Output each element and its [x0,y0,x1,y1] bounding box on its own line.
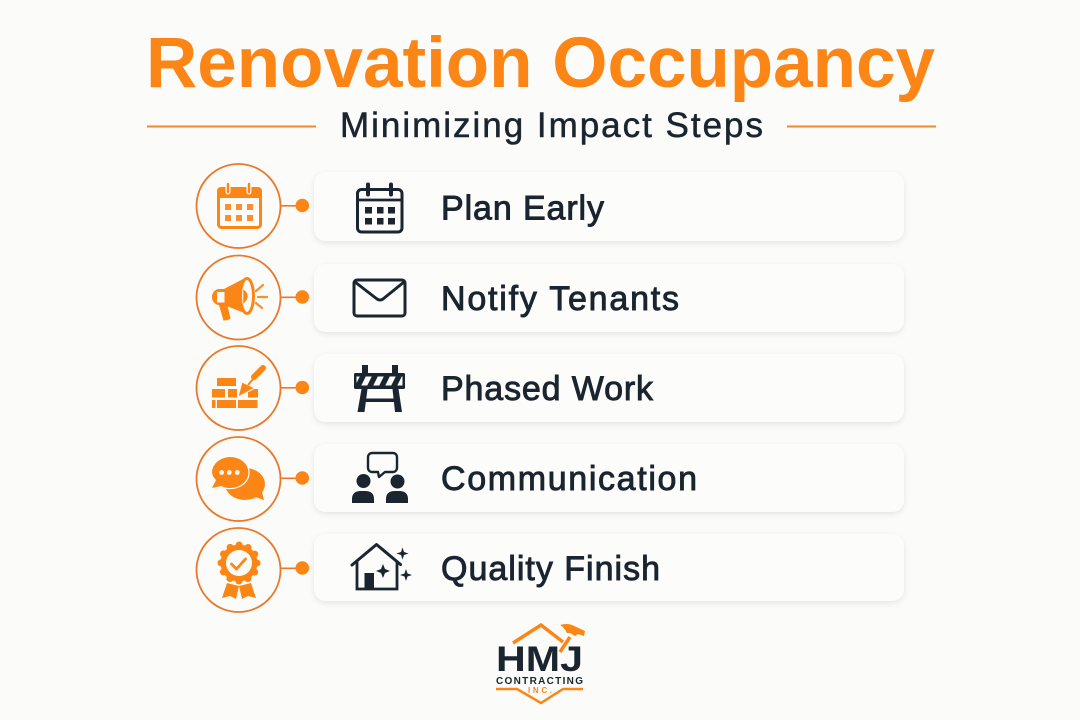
panel: Communication step [196,437,904,521]
card: Plan Early [314,172,904,241]
card: Notify Tenants [314,264,904,332]
connector: Plan Early [281,199,309,212]
label: Plan Early: Plan Early [441,190,604,228]
panel: Quality Finish step [196,528,904,612]
dark icon: house with sparkles [352,544,412,589]
orange icon: award rosette [196,528,280,612]
label: Notify Tenants: Notify Tenants [441,280,679,318]
orange icon: megaphone [196,256,280,340]
logo: HMJ Contracting Inc.: INC. [528,686,552,695]
panel: Plan Early step [196,164,904,248]
card: Phased Work [314,354,904,422]
panel: Phased Work step [196,346,904,430]
panel: Notify Tenants step [196,256,904,340]
logo: HMJ Contracting Inc. [496,624,585,703]
subtitle with rules: Minimizing Impact Steps [340,106,763,145]
connector: Quality Finish [281,561,309,575]
connector: Communication [281,471,309,485]
connector: Phased Work [281,381,309,394]
label: Phased Work: Phased Work [441,370,654,408]
card: Quality Finish [314,534,904,601]
orange icon: calendar [196,164,280,248]
label: Quality Finish: Quality Finish [441,550,660,588]
label: Communication: Communication [441,460,697,498]
card: Communication [314,444,904,512]
logo: HMJ Contracting Inc.: HMJ [496,640,583,679]
orange icon: chat bubbles [196,437,280,521]
connector: Notify Tenants [281,290,309,304]
dark icon: road barrier [354,365,405,412]
dark icon: calendar [358,184,402,232]
dark icon: people talking [352,453,408,503]
logo: HMJ Contracting Inc.: CONTRACTING [496,676,583,687]
orange icon: bricks and trowel [196,346,280,430]
dark icon: envelope [354,280,405,316]
title: Renovation Occupancy [146,24,936,103]
